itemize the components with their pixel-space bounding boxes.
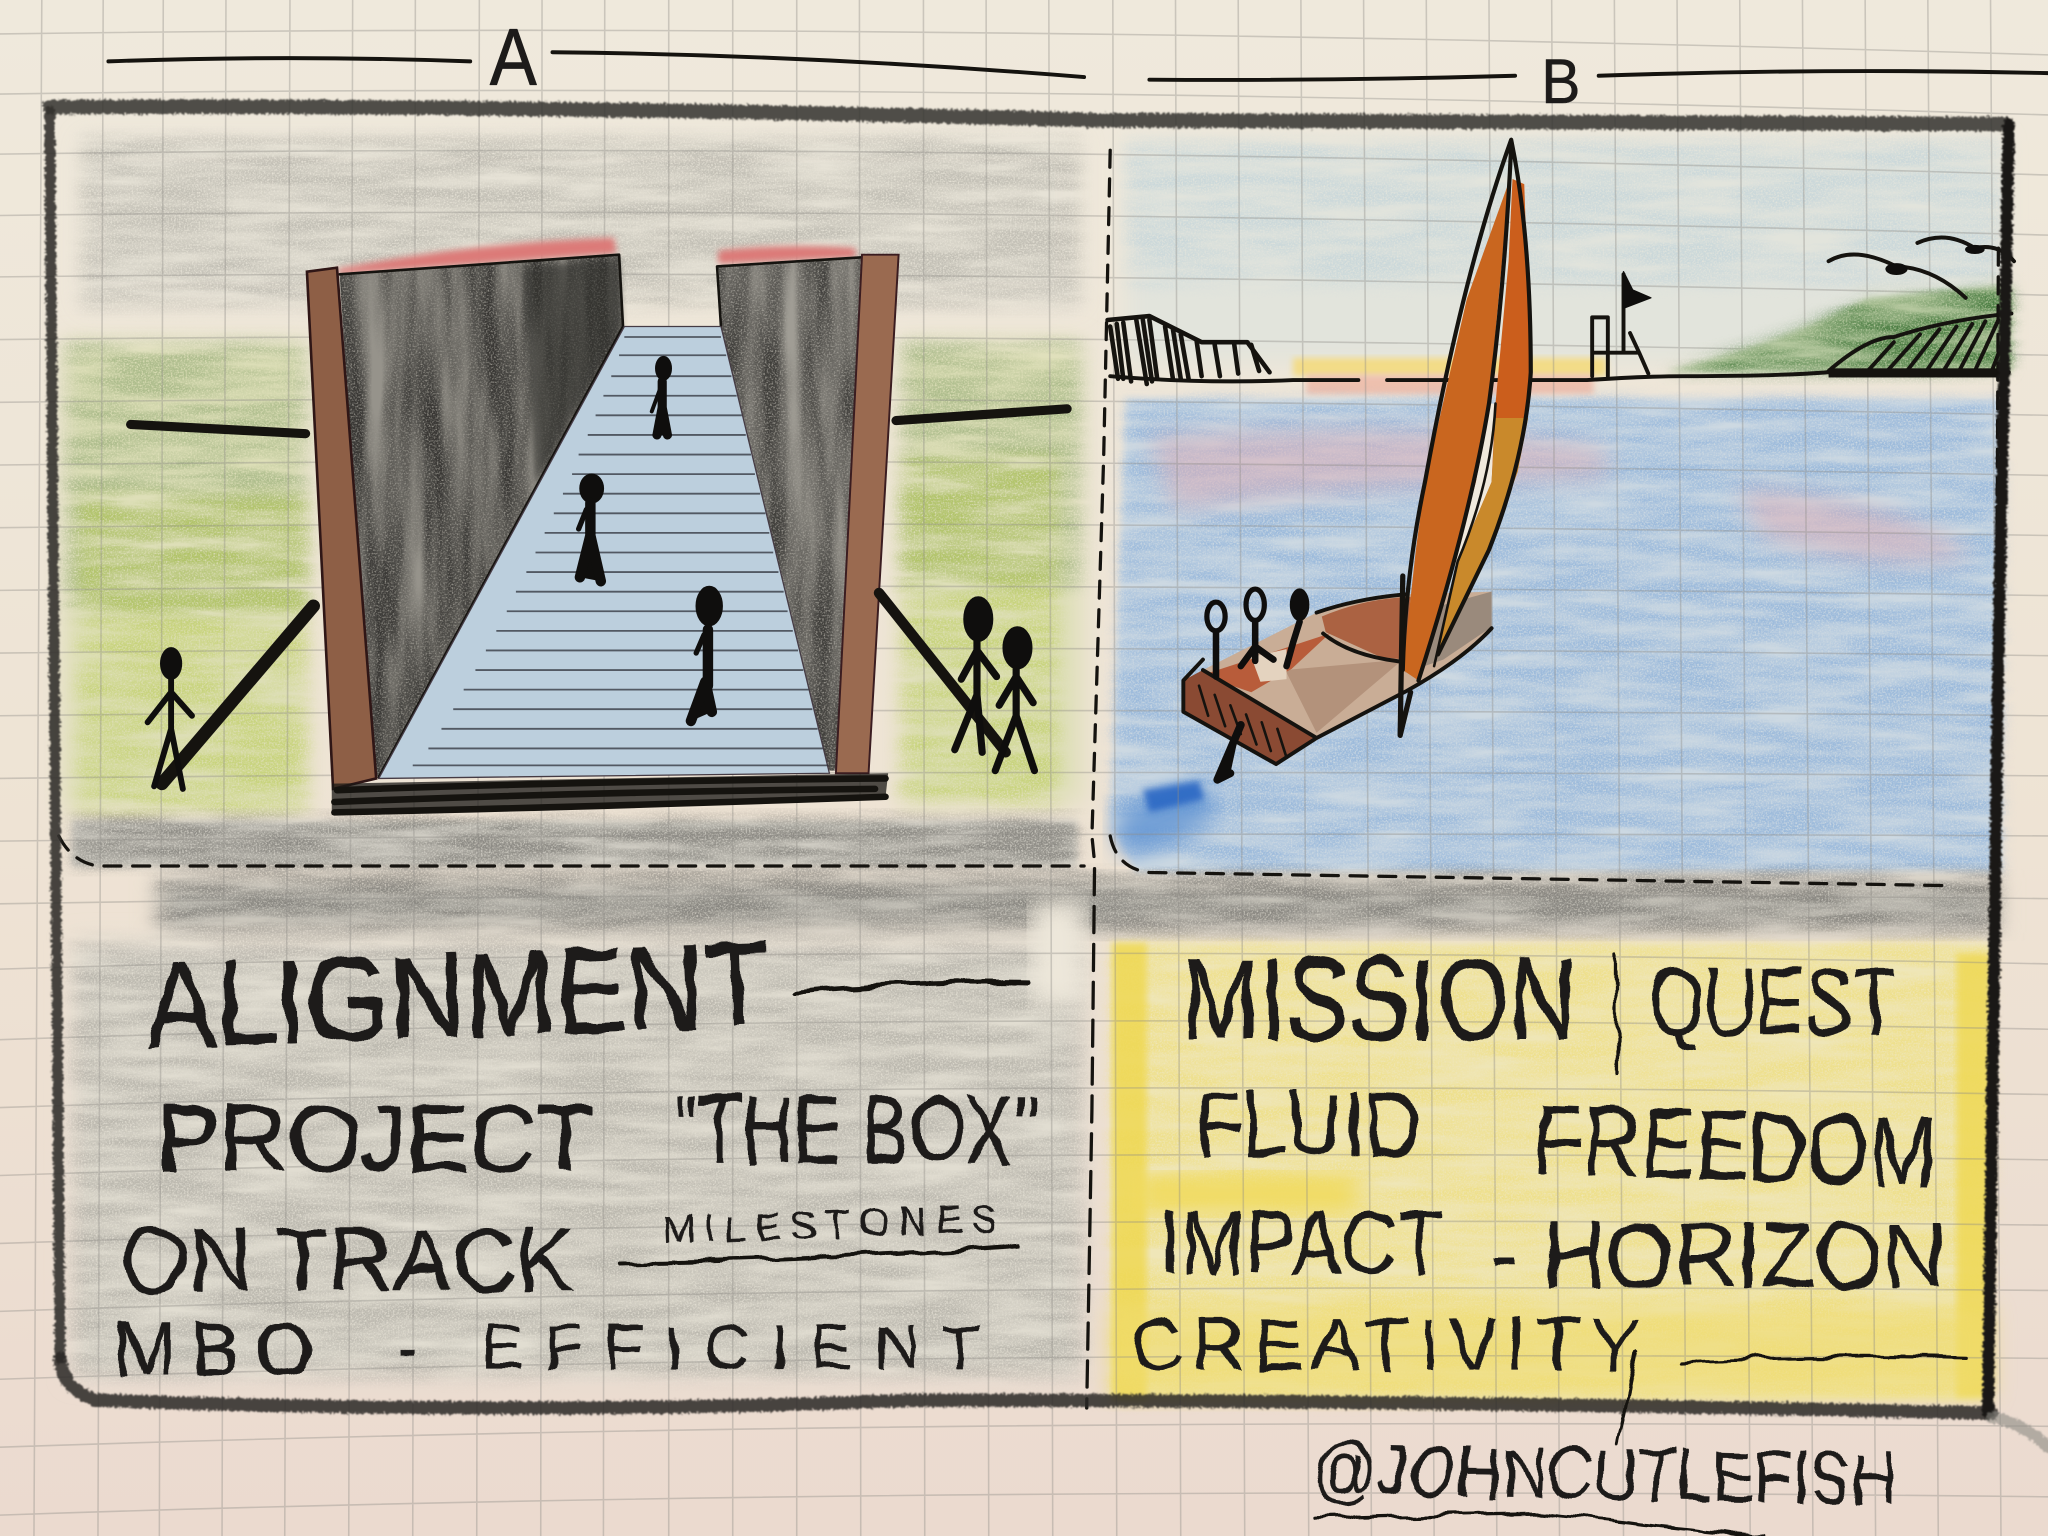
heading: quest: QUEST xyxy=(1648,948,1896,1055)
graphic A: the box with people on track xyxy=(131,238,1067,815)
side beams xyxy=(131,409,1067,434)
sail gap xyxy=(1450,404,1496,575)
lower grey band xyxy=(157,872,1998,933)
section A heading: A xyxy=(490,13,537,103)
word: mbo: MBO xyxy=(114,1307,313,1392)
text block B: mission words xyxy=(1130,934,1966,1443)
word: fluid: FLUID xyxy=(1195,1074,1421,1176)
right hatched hill xyxy=(1829,313,2011,377)
panel B yellow text background xyxy=(1110,943,1992,1400)
left inner wall xyxy=(340,255,623,777)
panel B sky wash xyxy=(1126,141,2001,363)
word: milestones with rule: MILESTONES xyxy=(662,1198,998,1252)
heading: mission: MISSION xyxy=(1182,934,1576,1065)
section A heading xyxy=(108,13,1084,103)
stern transom xyxy=(1183,670,1317,764)
horizon line xyxy=(1110,372,2009,381)
pencil colour fills xyxy=(63,137,2001,1400)
right sail xyxy=(1438,179,1531,654)
word: creativity with arrow xyxy=(1130,1305,1966,1443)
section B heading xyxy=(1149,47,2048,117)
panel B sunset glow xyxy=(1293,358,1607,394)
floor of the box xyxy=(379,327,829,778)
cabin top xyxy=(1322,597,1411,660)
red deck xyxy=(1202,633,1330,692)
left sail xyxy=(1403,183,1509,680)
text block A: alignment words xyxy=(114,918,1038,1392)
floor planks xyxy=(413,337,828,765)
word: efficient: - EFFICIENT xyxy=(398,1313,980,1383)
dashed rounded panel outlines xyxy=(59,150,1998,886)
person on floor near xyxy=(691,586,722,721)
signature: @JOHNCUTLEFISH xyxy=(1312,1429,1898,1520)
rudder xyxy=(1217,725,1241,780)
foredeck xyxy=(1405,592,1492,673)
word: the box: "THE BOX" xyxy=(673,1076,1038,1183)
word: freedom: FREEDOM xyxy=(1531,1084,1939,1209)
panel B water xyxy=(1110,398,2001,872)
word: on track: ON TRACK xyxy=(120,1210,575,1309)
panel A ground shading below box xyxy=(72,816,1078,869)
word: project: PROJECT xyxy=(157,1085,594,1190)
panel A grass shading xyxy=(63,342,1081,812)
tan deck xyxy=(1285,660,1403,733)
person outside right 2 xyxy=(995,627,1034,771)
section B heading: B xyxy=(1541,47,1580,117)
tower with flag xyxy=(1592,272,1651,376)
box base boards xyxy=(332,773,888,815)
hull deck xyxy=(1183,592,1492,764)
left cliff xyxy=(1108,316,1270,384)
person outside left xyxy=(148,648,192,789)
person on floor middle xyxy=(579,474,603,581)
heading: alignment: ALIGNMENT xyxy=(143,918,771,1073)
word: horizon: - HORIZON xyxy=(1489,1205,1946,1307)
word: creativity with arrow: CREATIVITY xyxy=(1130,1305,1639,1386)
right brown wall xyxy=(836,255,899,773)
left brown wall xyxy=(307,268,376,789)
person on floor far xyxy=(652,357,671,435)
crew on boat xyxy=(1207,589,1309,677)
centre dashed divider xyxy=(1087,869,1095,1408)
birds xyxy=(1829,237,2014,298)
word: impact: IMPACT xyxy=(1160,1193,1443,1292)
person outside right 1 xyxy=(955,597,997,752)
graphic B: sailboat on open water xyxy=(1108,140,2014,780)
sail xyxy=(1400,140,1531,735)
green hill xyxy=(1665,285,2011,372)
red box top edge xyxy=(337,238,856,274)
panel A text background shading xyxy=(72,901,1084,1378)
panel A sky shading xyxy=(81,137,1080,307)
right inner wall xyxy=(718,257,862,771)
boat hull xyxy=(1183,592,1492,764)
